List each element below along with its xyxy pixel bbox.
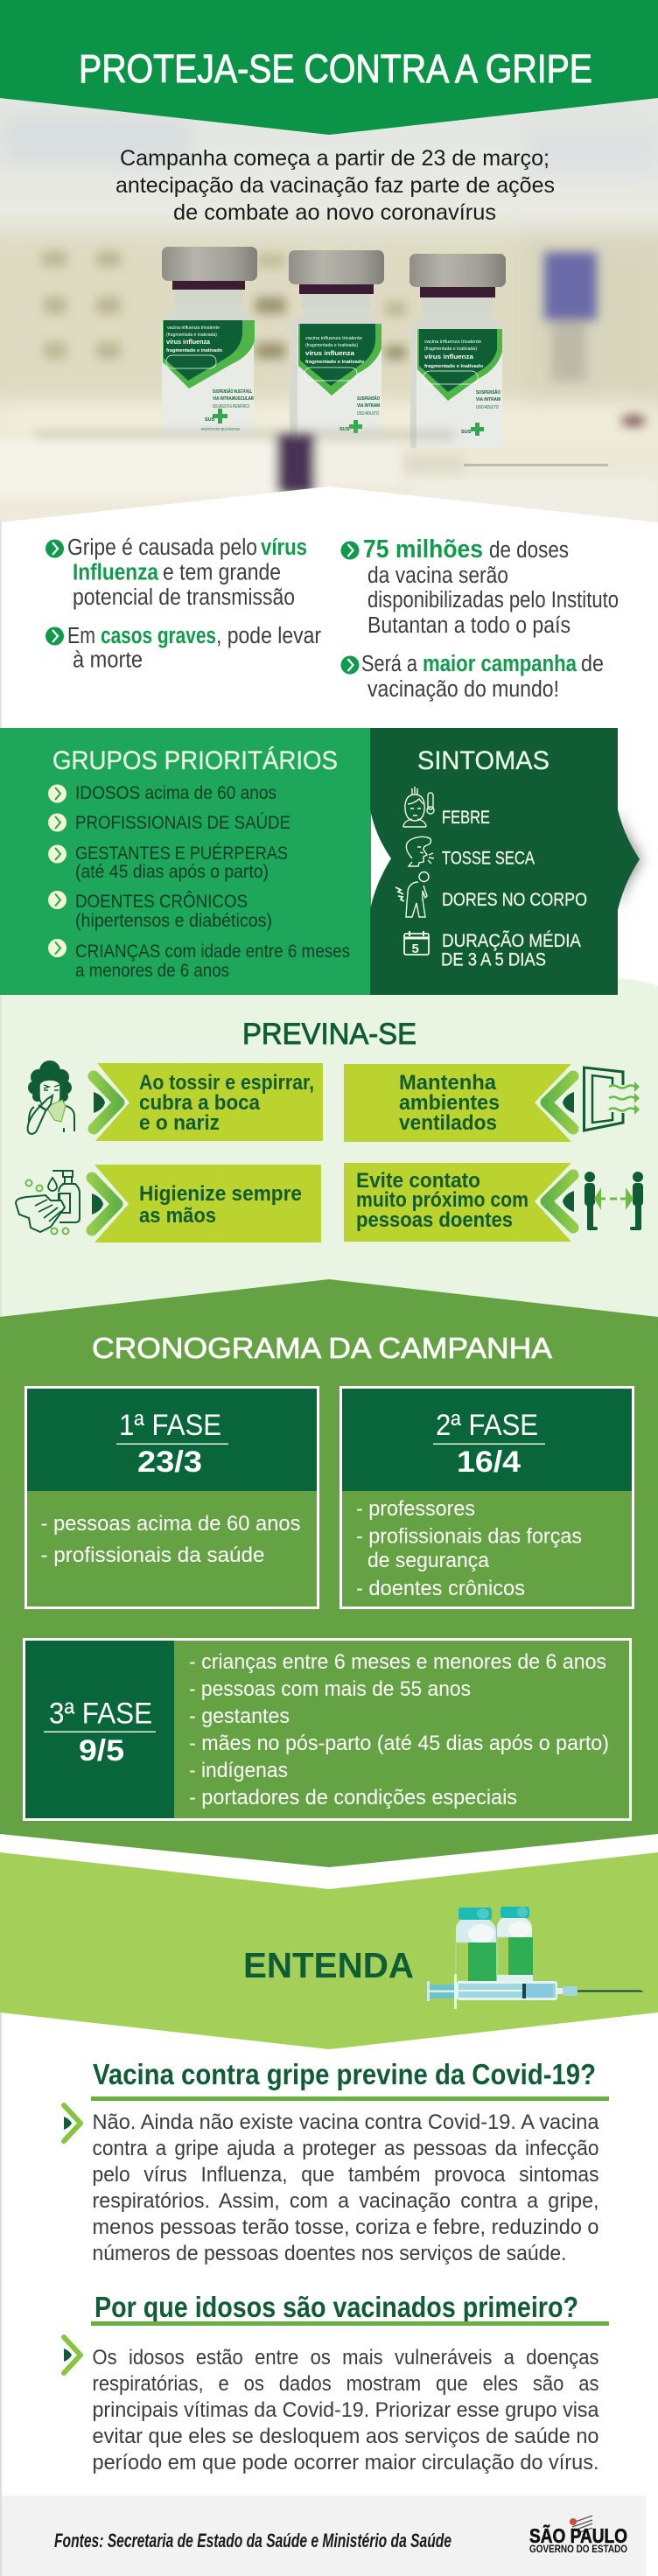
logo: governo de são paulo (529, 2516, 627, 2555)
phase 3 card: 9/5 (79, 1734, 124, 1768)
text: as mãos (139, 1204, 216, 1228)
logo: governo de são paulo: SÃO PAULO (529, 2524, 627, 2547)
body text (93, 2346, 599, 2474)
vial 2: VIA INTRAM (357, 403, 380, 409)
phase 3 card: 3ª FASE (49, 1698, 152, 1731)
vial 1: (fragmentada e inativada) (166, 332, 217, 338)
sources: Fontes: Secretaria de Estado da Saúde e Ministério da Saúde (54, 2530, 452, 2552)
vial 3: fragmentado e inativado (424, 364, 484, 369)
text (139, 1182, 302, 1228)
priority list (48, 783, 350, 981)
phase 3 card: - crianças entre 6 meses e menores de 6 anos (189, 1650, 606, 1674)
phase 2 card (341, 1388, 634, 1608)
vial 1: INSTITUTO BUTANTAN (201, 427, 240, 431)
priority list: GESTANTES E PUÉRPERAS (75, 844, 288, 864)
key facts: right column: maior campanha (423, 652, 578, 676)
icon: open window (584, 1068, 640, 1130)
priority list: IDOSOS acima de 60 anos (75, 783, 276, 803)
text: duration (441, 930, 581, 970)
phase 1 card: 23/3 (137, 1446, 202, 1479)
phase 2 card: 2ª FASE (436, 1409, 538, 1442)
icon: calendar (404, 931, 429, 956)
vial 3: USO ADULTO (476, 405, 499, 410)
key facts: right column: Butantan a todo o país (368, 613, 570, 638)
text: pessoas doentes (356, 1208, 513, 1232)
phase 2 card: de segurança (368, 1549, 489, 1572)
phase 2 card: - doentes crônicos (356, 1577, 525, 1600)
priority list: (até 45 dias após o parto) (75, 862, 269, 882)
chevron (64, 2337, 80, 2373)
vial 1 (162, 247, 257, 434)
heading: previna-se: PREVINA-SE (242, 1018, 416, 1051)
vial 1: USO ADULTO E PEDIÁTRICO (213, 403, 249, 410)
key facts: left column: Em (67, 624, 95, 648)
vial 1: fragmentado e inativado (166, 348, 223, 354)
vial 3: vírus influenza (424, 353, 474, 360)
syringe, out of focus (0, 431, 658, 523)
priority list: CRIANÇAS com idade entre 6 meses (75, 942, 350, 962)
question 2 (64, 2291, 609, 2474)
chevron (546, 1076, 574, 1129)
shadow (618, 809, 641, 910)
key facts: left column: e tem grande (163, 560, 281, 584)
heading: GRUPOS PRIORITÁRIOS (52, 746, 338, 775)
icon: keep distance (584, 1172, 643, 1230)
text (399, 1071, 500, 1135)
vial 1: SUS (205, 417, 215, 423)
icon: cough (406, 836, 434, 866)
phase 2 card: - professores (356, 1497, 475, 1521)
vial 3: (fragmentada e inativada) (424, 346, 477, 352)
key facts: left column: potencial de transmissão (73, 585, 295, 610)
icon: washing hands (16, 1171, 80, 1234)
bullet: severe cases (46, 626, 64, 646)
body text: principais vítimas da Covid-19. Priorizar esse grupo visa (93, 2398, 599, 2422)
phase 2 card: - profissionais das forças (356, 1524, 582, 1549)
icon: fever (403, 787, 434, 827)
vial 3: SUSPENSÃO (476, 389, 500, 396)
phase 3 card: - mães no pós-parto (até 45 dias após o parto) (189, 1732, 609, 1755)
question 1 (64, 2058, 609, 2265)
key facts: left column: , pode levar (216, 624, 321, 648)
vial 1: vacina influenza trivalente (167, 326, 220, 331)
vial 3: vacina influenza trivalente (424, 340, 481, 345)
text: Higienize sempre (139, 1182, 302, 1206)
text: fever: FEBRE (442, 808, 490, 828)
body text: Os idosos estão entre os mais vulneráveis a doenças (93, 2346, 598, 2370)
key facts: right column: de (581, 652, 604, 676)
vial 1: SUSPENSÃO INJETÁVEL (213, 388, 252, 395)
phase 3 card: - pessoas com mais de 55 anos (189, 1677, 471, 1701)
bullet: 75 million (341, 541, 359, 560)
priority list: DOENTES CRÔNICOS (75, 892, 248, 912)
logo: governo de são paulo: GOVERNO DO ESTADO (529, 2544, 627, 2555)
vial 2: vírus influenza (305, 349, 355, 357)
body text: contra a gripe ajuda a proteger as pessoas da infecção (93, 2137, 598, 2160)
panel: sintomas (370, 728, 641, 995)
bullet: virus (46, 539, 64, 558)
chevron (94, 1076, 119, 1129)
vial 2: vacina influenza trivalente (305, 336, 362, 341)
vial 3: VIA INTRAM (476, 397, 500, 402)
vial 2 (289, 250, 384, 439)
body text: respiratórias, e os dados mostram que eles são as (93, 2372, 598, 2396)
priority list: (hipertensos e diabéticos) (75, 911, 272, 931)
header banner (0, 0, 658, 135)
key facts: right column: Será a (361, 652, 418, 676)
phase 1 card: - pessoas acima de 60 anos (40, 1512, 301, 1536)
white content area behind bullets (0, 486, 658, 735)
text: Evite contato (356, 1169, 480, 1193)
panel: higienize as mãos (92, 1165, 321, 1242)
chevron (92, 1178, 117, 1230)
text: muito próximo com (356, 1188, 528, 1212)
panel: evite contato (344, 1163, 574, 1242)
key facts: left column: à morte (73, 648, 143, 672)
body text: menos pessoas terão tosse, coriza e febre, reduzindo o (93, 2216, 598, 2239)
vial 1: vírus influenza (166, 338, 211, 346)
text: duration: DURAÇÃO MÉDIA (442, 930, 581, 951)
priority list: a menores de 6 anos (75, 961, 229, 981)
vial 1: VIA INTRAMUSCULAR (213, 396, 254, 402)
phase 3 card: - gestantes (189, 1704, 290, 1728)
text (356, 1169, 528, 1232)
photo: vaccine vials (0, 88, 658, 525)
subtitle: antecipação da vacinação faz parte de ações (116, 173, 555, 198)
panel: cubra a boca (94, 1063, 323, 1141)
banner: entenda (0, 1852, 658, 2049)
body text: período em que pode ocorrer maior circulação do vírus. (93, 2451, 598, 2474)
vial 3 (410, 254, 506, 448)
vial 2: fragmentado e inativado (305, 360, 365, 365)
heading: Vacina contra gripe previne da Covid-19? (93, 2058, 596, 2090)
icon: vaccine vials and syringe (427, 1907, 644, 2009)
body text: evitar que eles se desloquem aos serviços de saúde no (93, 2425, 598, 2448)
key facts: right column: de doses (489, 538, 569, 563)
key facts: right column: da vacina serão (368, 564, 508, 588)
heading: ENTENDA (243, 1945, 414, 1985)
text: duration: DE 3 A 5 DIAS (441, 950, 546, 970)
heading: CRONOGRAMA DA CAMPANHA (92, 1332, 552, 1364)
body text (93, 2110, 599, 2265)
chevron (64, 2105, 80, 2141)
icon: calendar: 5 (411, 942, 419, 956)
vial 2: USO ADULTO (357, 411, 379, 416)
text: Ao tossir e espirrar, (139, 1071, 314, 1095)
phase 1 card: - profissionais da saúde (40, 1544, 264, 1567)
text (139, 1071, 314, 1135)
priority list: PROFISSIONAIS DE SAÚDE (75, 813, 290, 833)
footer (2, 2496, 646, 2576)
bullet: biggest campaign (341, 656, 359, 674)
key facts: left column: Gripe é causada pelo (67, 536, 257, 560)
phase 1 card (26, 1388, 318, 1608)
section: cronograma da campanha (0, 1279, 658, 1867)
text: ventilados (399, 1111, 497, 1135)
phase 2 card: 16/4 (457, 1446, 521, 1479)
vial 2: SUSPENSÃO (357, 396, 380, 402)
title: PROTEJA-SE CONTRA A GRIPE (79, 46, 592, 91)
phase 3 card (24, 1640, 630, 1820)
text: cubra a boca (139, 1091, 261, 1115)
text: Mantenha (399, 1071, 497, 1095)
vial 2: SUS (340, 427, 350, 432)
subtitle (116, 146, 555, 225)
panel: grupos prioritários (0, 728, 371, 995)
key facts: right column: 75 milhões (363, 536, 483, 564)
key facts: left column: Influenza (73, 560, 159, 584)
vial 3: SUS (461, 430, 472, 435)
key facts: right column: disponibilizadas pelo Instituto (368, 588, 619, 612)
chevron (546, 1175, 574, 1228)
key facts: right column (341, 536, 619, 702)
subtitle: Campanha começa a partir de 23 de março; (120, 146, 550, 171)
body text: Não. Ainda não existe vacina contra Covid-19. A vacina (93, 2110, 599, 2134)
body text: respiratórios. Assim, com a vacinação contra a gripe, (93, 2189, 598, 2213)
heading: SINTOMAS (417, 746, 550, 775)
phase 1 card: 1ª FASE (119, 1409, 221, 1442)
light background: previna-se section (0, 978, 658, 1330)
text: body pain: DORES NO CORPO (442, 890, 587, 910)
key facts: left column: vírus (261, 536, 307, 560)
panel: ambientes ventilados (344, 1064, 574, 1142)
heading: Por que idosos são vacinados primeiro? (94, 2291, 578, 2323)
key facts: right column: vacinação do mundo! (368, 677, 559, 702)
body text: números de pessoas doentes nos serviços de saúde. (93, 2242, 567, 2265)
text: e o nariz (139, 1111, 220, 1135)
icon: body pain (396, 872, 429, 917)
key facts: left column (46, 536, 321, 672)
subtitle: de combate ao novo coronavírus (173, 200, 496, 225)
text: ambientes (399, 1091, 500, 1115)
body text: pelo vírus Influenza, que também provoca sintomas (93, 2163, 598, 2187)
phase 3 card: - indígenas (189, 1759, 288, 1782)
icon: person covering cough (28, 1060, 74, 1134)
white background under cronograma (0, 1829, 658, 1890)
vial 2: (fragmentada e inativada) (305, 343, 358, 348)
text: dry cough: TOSSE SECA (442, 849, 535, 868)
phase 3 card: - portadores de condições especiais (189, 1786, 517, 1810)
key facts: left column: casos graves (101, 624, 216, 648)
